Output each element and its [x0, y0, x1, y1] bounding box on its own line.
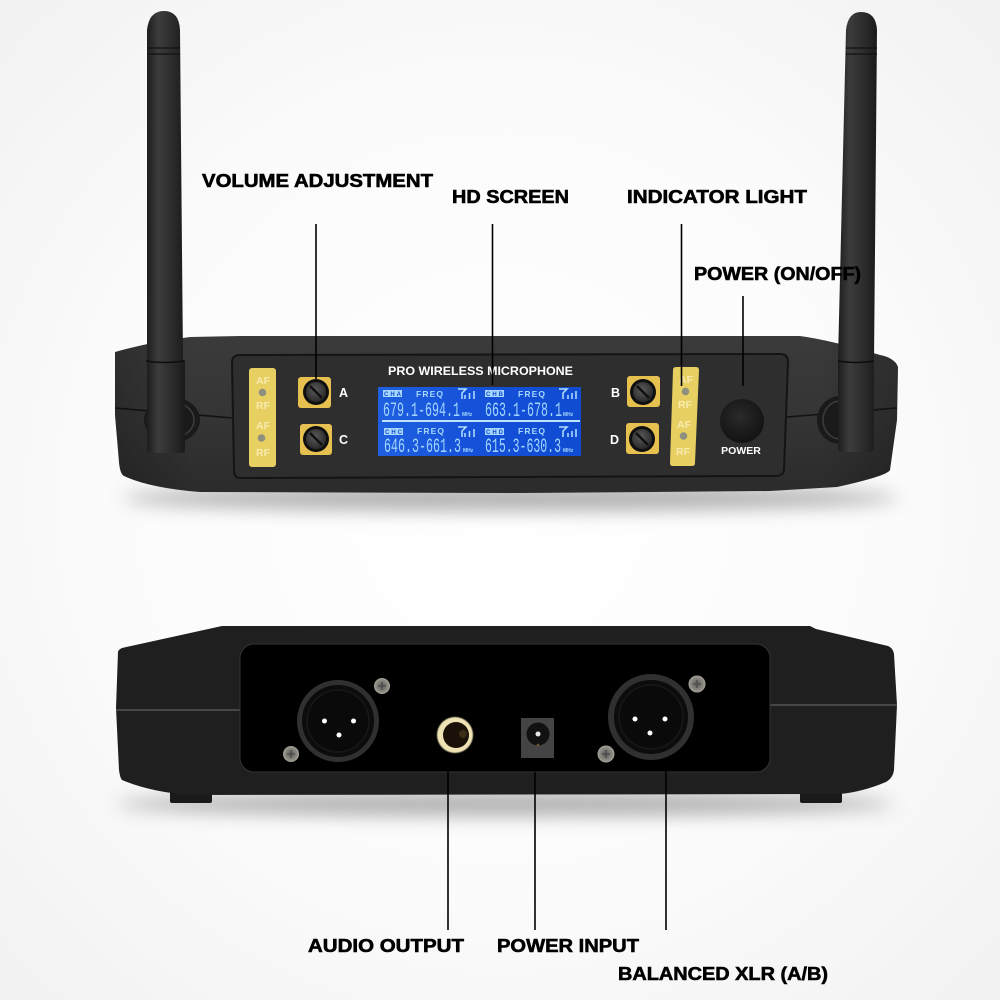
- knob D: D: [610, 433, 619, 447]
- right indicator strip: [670, 367, 699, 466]
- front view of receiver: [115, 11, 898, 511]
- knob A: [298, 377, 348, 408]
- knob D: [610, 423, 659, 454]
- callout: HD screen: HD SCREEN: [452, 186, 569, 207]
- LCD screen: CHC: [385, 430, 403, 436]
- front control panel: [232, 354, 788, 478]
- DC power socket: [521, 718, 554, 758]
- rear chassis: [116, 626, 897, 795]
- rear connector panel: [240, 644, 770, 772]
- LCD screen: CHD: [486, 430, 504, 436]
- screw: [598, 746, 614, 762]
- LCD screen: MHz: [462, 412, 473, 418]
- LCD screen: MHz: [463, 448, 474, 454]
- callout: audio output: AUDIO OUTPUT: [308, 935, 465, 956]
- chassis with antenna sockets: [115, 336, 898, 493]
- rear shadow: [117, 792, 893, 816]
- right indicator strip: RF: [676, 446, 691, 458]
- right XLR connector: [598, 676, 706, 762]
- right indicator strip: AF: [679, 374, 694, 386]
- left indicator strip: [249, 368, 276, 467]
- LCD screen: FREQ: [417, 426, 444, 436]
- front shadow: [122, 485, 898, 511]
- panel title: PRO WIRELESS MICROPHONE: [388, 366, 573, 378]
- callout: balanced XLR: BALANCED XLR (A/B): [618, 963, 828, 984]
- LCD screen: MHz: [563, 448, 574, 454]
- LCD screen: [378, 387, 581, 459]
- left indicator strip: AF: [256, 420, 271, 432]
- left indicator strip: RF: [256, 400, 271, 412]
- LCD screen: CHA: [384, 392, 402, 398]
- knob A: A: [339, 386, 348, 400]
- right antenna: [838, 12, 877, 452]
- audio output jack: [437, 717, 473, 753]
- LCD screen: 646.3-661.3: [384, 436, 461, 459]
- screw: [374, 678, 390, 694]
- callout: volume adjustment: VOLUME ADJUSTMENT: [202, 170, 434, 191]
- left XLR connector: [283, 678, 390, 762]
- screw: [283, 746, 299, 762]
- left indicator strip: RF: [256, 447, 271, 459]
- LCD screen: MHz: [563, 412, 574, 418]
- power button: POWER: [721, 445, 761, 457]
- screw: [688, 676, 706, 692]
- knob C: [300, 424, 348, 455]
- right indicator strip: RF: [678, 399, 693, 411]
- rear view of receiver: [116, 626, 897, 816]
- knob B: B: [611, 386, 620, 400]
- left foot: [170, 790, 212, 803]
- LCD screen: CHB: [486, 392, 504, 398]
- LCD screen: FREQ: [518, 426, 545, 436]
- LCD screen: FREQ: [416, 389, 443, 399]
- callout: power input: POWER INPUT: [497, 935, 640, 956]
- LCD screen: 615.3-630.3: [485, 436, 561, 459]
- knob B: [611, 376, 660, 407]
- knob C: C: [339, 433, 348, 447]
- right foot: [800, 790, 842, 803]
- right indicator strip: AF: [677, 419, 692, 431]
- left indicator strip: AF: [256, 375, 271, 387]
- LCD screen: 663.1-678.1: [485, 400, 562, 423]
- rear seam lines: [116, 705, 897, 710]
- left antenna: [146, 11, 185, 453]
- callout: indicator light: INDICATOR LIGHT: [627, 186, 808, 207]
- power button: [720, 399, 764, 457]
- LCD screen: 679.1-694.1: [383, 400, 460, 423]
- LCD screen: FREQ: [518, 389, 545, 399]
- callout: power on/off: POWER (ON/OFF): [694, 263, 861, 284]
